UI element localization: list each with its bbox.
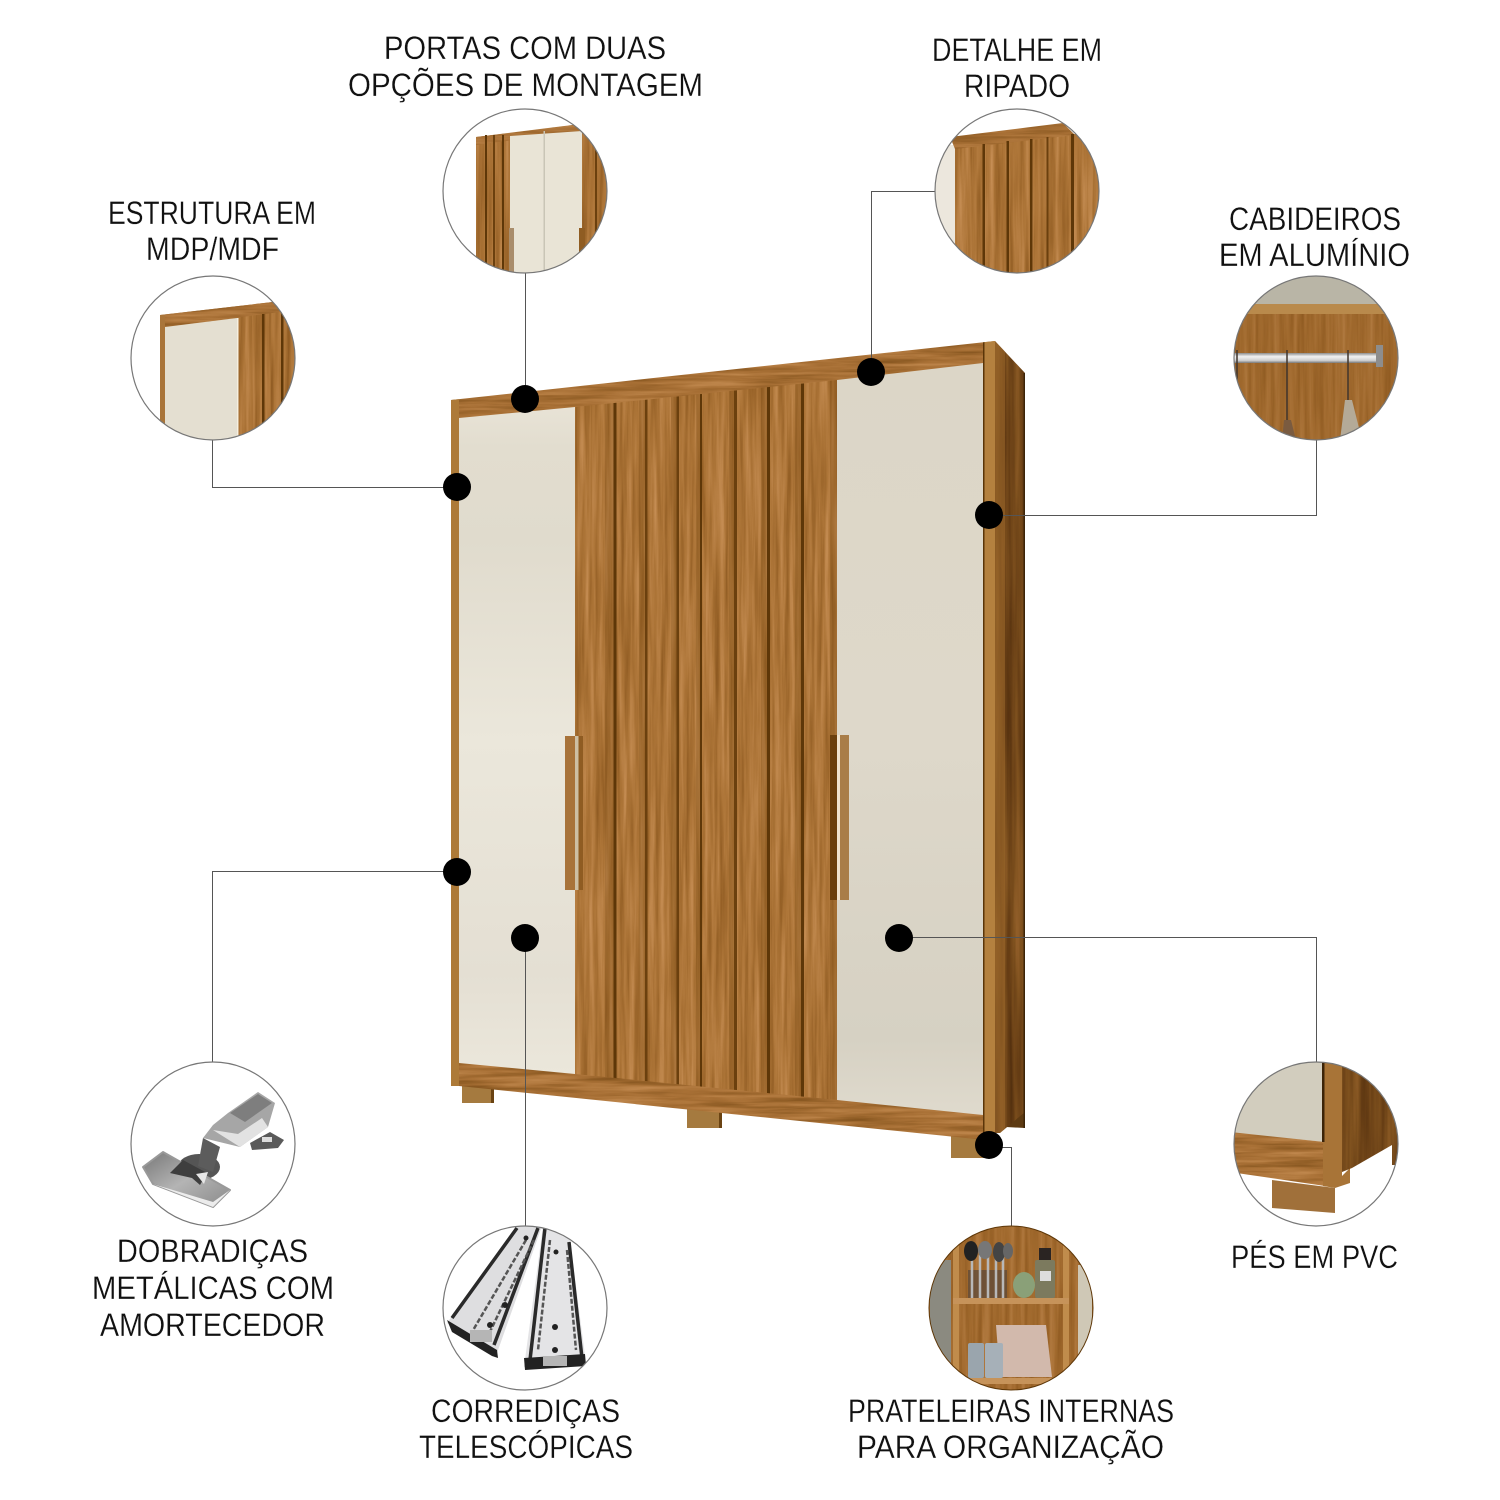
- wardrobe: [451, 340, 1025, 1158]
- heading: pes: PÉS EM PVC: [1231, 1239, 1398, 1275]
- callout: portas: [348, 30, 703, 280]
- detail image: hinge: [131, 1062, 295, 1226]
- heading: portas: OPÇÕES DE MONTAGEM: [348, 67, 703, 103]
- left handle: [565, 736, 583, 890]
- heading: portas: PORTAS COM DUAS: [384, 30, 666, 66]
- right door: [837, 363, 983, 1115]
- heading: estrutura: [108, 195, 316, 267]
- detail image: shelves: [929, 1226, 1094, 1391]
- heading: dobradicas: AMORTECEDOR: [100, 1307, 325, 1343]
- heading: ripado: RIPADO: [964, 68, 1070, 104]
- marker dots: [443, 358, 1003, 1159]
- callout: ripado: [932, 32, 1105, 280]
- heading: portas: [348, 30, 703, 103]
- heading: corredicas: TELESCÓPICAS: [419, 1429, 633, 1465]
- heading: dobradicas: DOBRADIÇAS: [117, 1233, 308, 1269]
- heading: corredicas: [419, 1393, 633, 1465]
- heading: estrutura: MDP/MDF: [146, 231, 279, 267]
- bag: [996, 1325, 1052, 1377]
- heading: dobradicas: METÁLICAS COM: [92, 1270, 334, 1306]
- heading: corredicas: CORREDIÇAS: [431, 1393, 620, 1429]
- leader lines: [212, 192, 1316, 1226]
- feet: [462, 1084, 990, 1158]
- callout: estrutura: [108, 195, 316, 445]
- right handle: [830, 735, 849, 900]
- heading: cabideiros: CABIDEIROS: [1229, 201, 1401, 237]
- wardrobe frame: [451, 340, 996, 1142]
- heading: estrutura: ESTRUTURA EM: [108, 195, 316, 231]
- heading: cabideiros: [1219, 201, 1410, 273]
- detail image: estrutura: [130, 276, 300, 445]
- left door: [459, 407, 575, 1074]
- heading: cabideiros: EM ALUMÍNIO: [1219, 237, 1410, 273]
- heading: prateleiras: [848, 1393, 1174, 1465]
- callout: cabideiros: [1219, 201, 1410, 441]
- heading: prateleiras: PRATELEIRAS INTERNAS: [848, 1393, 1174, 1429]
- detail image: slide rails: [443, 1226, 608, 1391]
- detail image: feet: [1230, 1060, 1405, 1227]
- heading: ripado: [932, 32, 1102, 104]
- heading: prateleiras: PARA ORGANIZAÇÃO: [857, 1429, 1164, 1465]
- callout: dobradicas: [92, 1062, 334, 1343]
- detail image: ripado: [935, 109, 1105, 280]
- wardrobe side panel: [995, 341, 1025, 1136]
- heading: ripado: DETALHE EM: [932, 32, 1102, 68]
- callout: pes: [1230, 1060, 1405, 1275]
- detail image: cabideiros: [1233, 276, 1399, 441]
- wood slat panel: [575, 378, 837, 1103]
- callout: prateleiras: [848, 1226, 1174, 1465]
- heading: dobradicas: [92, 1233, 334, 1343]
- detail image: portas: [443, 109, 610, 280]
- callout: corredicas: [419, 1226, 633, 1465]
- brushes: [964, 1241, 1013, 1298]
